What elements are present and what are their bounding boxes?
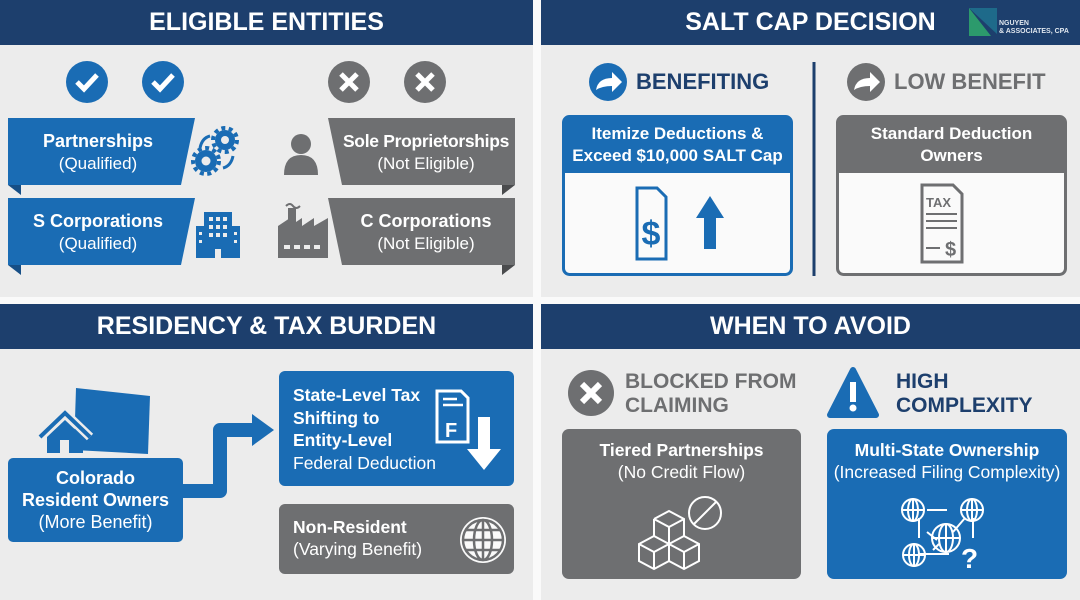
text: partnerships: Partnerships — [43, 131, 153, 151]
logo — [969, 8, 1069, 36]
text: partnerships — [43, 131, 153, 173]
text: standard: Owners — [920, 146, 983, 165]
factory — [278, 208, 328, 258]
text: non-resident: Non-Resident — [293, 517, 407, 537]
panel: salt cap decision — [541, 0, 1080, 297]
logo: NGUYEN — [999, 20, 1029, 27]
text: sole proprietorships: (Not Eligible) — [377, 154, 475, 173]
heading: high complexity: COMPLEXITY — [896, 394, 1033, 417]
heading: low benefit: LOW BENEFIT — [894, 69, 1046, 94]
heading: residency: RESIDENCY & TAX BURDEN — [97, 312, 436, 340]
text: itemize: Itemize Deductions & — [592, 124, 763, 143]
text: s corporations — [33, 211, 163, 253]
text: colorado: Colorado — [56, 468, 135, 488]
panel: when to avoid: ? — [961, 543, 978, 574]
heading: eligible entities — [0, 0, 533, 45]
text: state-level: Federal Deduction — [293, 452, 436, 472]
text: state-level: State-Level Tax — [293, 385, 420, 405]
text: non-resident — [293, 517, 422, 559]
boxes — [564, 116, 792, 274]
text: colorado: Resident Owners — [22, 490, 169, 510]
panel: salt cap decision: $ — [945, 239, 956, 261]
text: non-resident: (Varying Benefit) — [293, 539, 422, 559]
text: multi-state — [834, 440, 1060, 482]
heading: residency — [0, 304, 533, 349]
panel: salt cap decision: TAX — [926, 195, 951, 210]
icon: warning — [830, 370, 876, 415]
heading: blocked from claiming: CLAIMING — [625, 394, 729, 417]
heading: high complexity — [896, 370, 1033, 417]
text: partnerships: (Qualified) — [59, 154, 137, 173]
text: colorado — [22, 468, 169, 532]
banners — [8, 118, 195, 185]
panel: residency — [0, 304, 533, 600]
text: sole proprietorships — [343, 131, 509, 173]
heading: high complexity: HIGH — [896, 370, 948, 393]
text: standard: Standard Deduction — [871, 124, 1032, 143]
panel: salt cap decision: $ — [642, 215, 661, 253]
text: tiered partnerships — [599, 440, 764, 482]
logo: & ASSOCIATES, CPA — [999, 28, 1069, 35]
text: multi-state: Multi-State Ownership — [855, 440, 1039, 460]
icon: globe — [460, 517, 506, 563]
icon: cubes blocked — [639, 497, 721, 569]
building — [196, 212, 240, 258]
icon: blocked x — [568, 370, 614, 416]
icon: tax doc — [922, 185, 962, 262]
text: c corporations — [360, 211, 492, 253]
text: itemize — [572, 124, 783, 165]
heading: salt cap decision — [541, 0, 1080, 45]
text: multi-state: (Increased Filing Complexity) — [834, 462, 1060, 482]
text: state-level — [293, 385, 436, 472]
icon: low benefit arrow — [847, 63, 885, 101]
text: tiered partnerships: Tiered Partnerships — [599, 440, 764, 460]
heading: blocked from claiming: BLOCKED FROM — [625, 370, 796, 393]
heading: blocked from claiming — [625, 370, 796, 417]
heading: salt cap decision: SALT CAP DECISION — [685, 8, 936, 36]
text: s corporations: S Corporations — [33, 211, 163, 231]
text: state-level: Entity-Level — [293, 430, 392, 450]
panel: eligible entities — [0, 0, 533, 297]
text: c corporations: C Corporations — [360, 211, 492, 231]
icon: globe network — [902, 499, 983, 566]
panel: when to avoid — [541, 304, 1080, 600]
heading: when to avoid — [541, 304, 1080, 349]
icon: F doc down — [437, 391, 468, 442]
boxes — [8, 458, 183, 542]
text: tiered partnerships: (No Credit Flow) — [618, 462, 745, 482]
arrow — [183, 430, 256, 491]
icons: check and x marks — [8, 61, 515, 275]
text: itemize: Exceed $10,000 SALT Cap — [572, 146, 783, 165]
heading: benefiting: BENEFITING — [636, 69, 769, 94]
icon: dollar doc up — [637, 188, 666, 259]
icon: benefiting arrow — [589, 63, 627, 101]
text: state-level: Shifting to — [293, 408, 380, 428]
icon: colorado and house — [74, 388, 150, 454]
text: standard — [871, 124, 1032, 165]
heading: when to avoid: WHEN TO AVOID — [710, 312, 911, 340]
text: sole proprietorships: Sole Proprietorships — [343, 131, 509, 151]
panel: residency: F — [445, 420, 457, 442]
text: colorado: (More Benefit) — [38, 512, 153, 532]
text: s corporations: (Qualified) — [59, 234, 137, 253]
boxes — [562, 429, 801, 579]
text: c corporations: (Not Eligible) — [377, 234, 475, 253]
heading: eligible entities: ELIGIBLE ENTITIES — [149, 8, 384, 36]
gears — [195, 130, 235, 172]
person — [284, 134, 318, 175]
